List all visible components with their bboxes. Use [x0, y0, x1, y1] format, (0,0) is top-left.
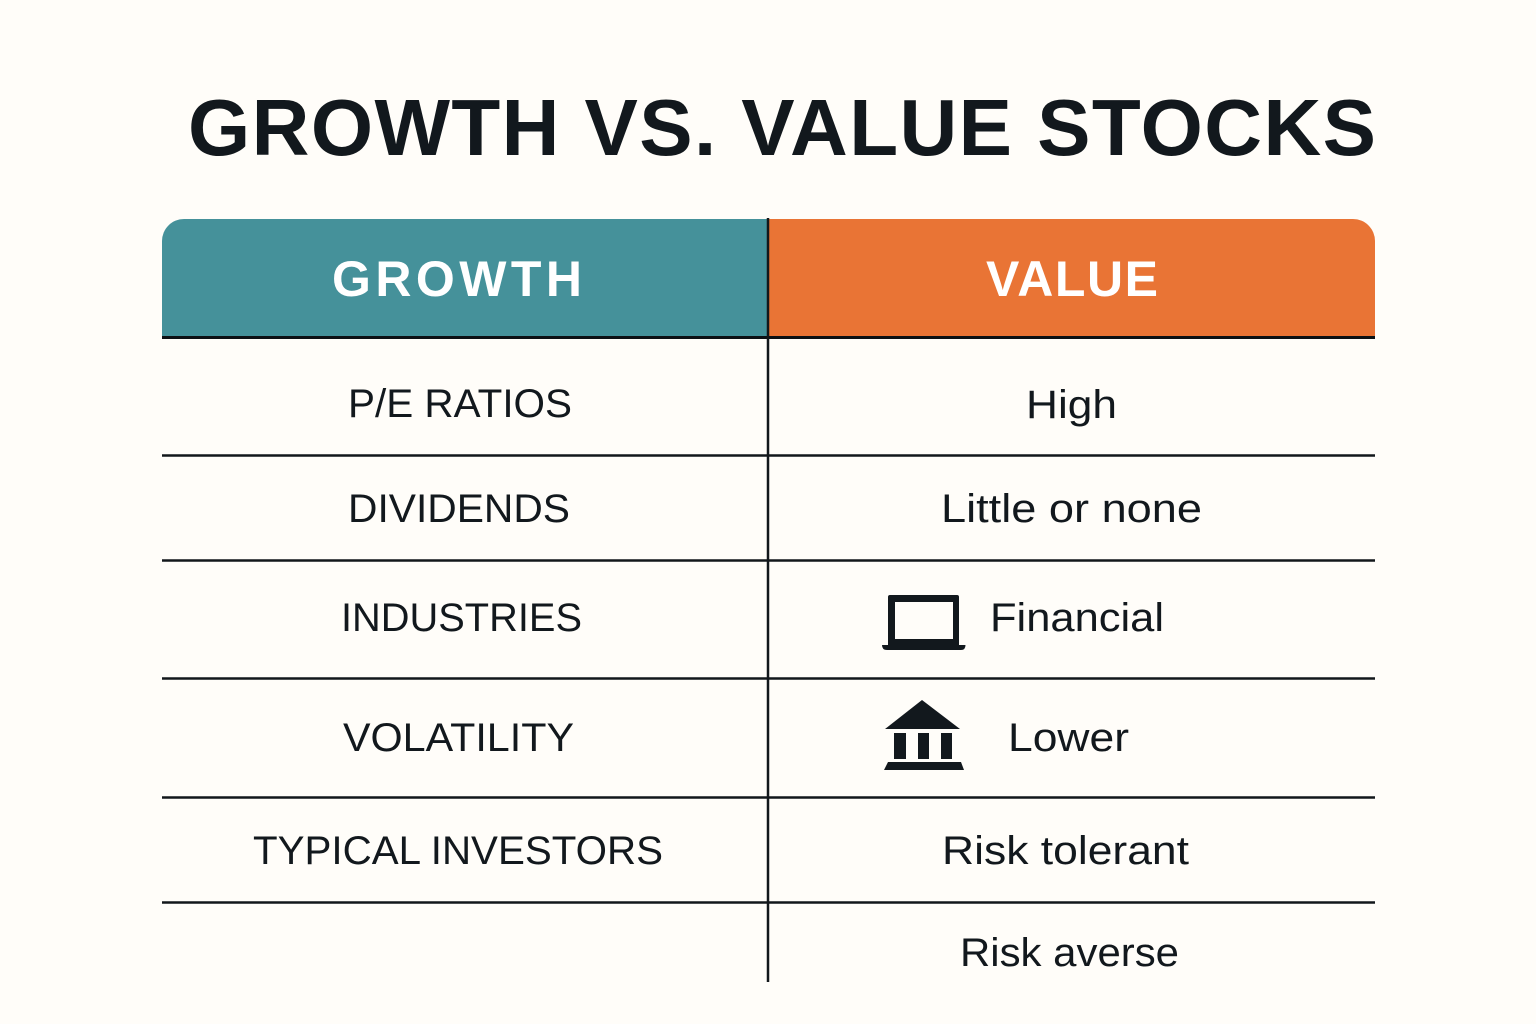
- comparison table: [162, 218, 1375, 982]
- row value: financial: Financial: [990, 596, 1164, 640]
- header: value column: VALUE: [986, 251, 1158, 307]
- header: growth column: [162, 219, 767, 336]
- row label: industries: INDUSTRIES: [341, 596, 582, 640]
- title: GROWTH VS. VALUE STOCKS: [188, 83, 1376, 172]
- row value: little or none: Little or none: [941, 487, 1202, 531]
- icon: bank building: [884, 700, 964, 770]
- row label: volatility: VOLATILITY: [343, 716, 574, 760]
- row label: dividends: DIVIDENDS: [348, 487, 570, 531]
- row label: typical investors: TYPICAL INVESTORS: [253, 829, 663, 873]
- row value: risk tolerant: Risk tolerant: [942, 829, 1189, 873]
- header: growth column: GROWTH: [332, 251, 582, 307]
- icon: laptop: [882, 595, 966, 650]
- row value: high: High: [1026, 383, 1117, 427]
- row value: lower: Lower: [1008, 716, 1129, 760]
- row value: risk averse: Risk averse: [960, 931, 1179, 975]
- header: value column: [769, 219, 1375, 336]
- row label: P/E ratios: P/E RATIOS: [348, 382, 572, 426]
